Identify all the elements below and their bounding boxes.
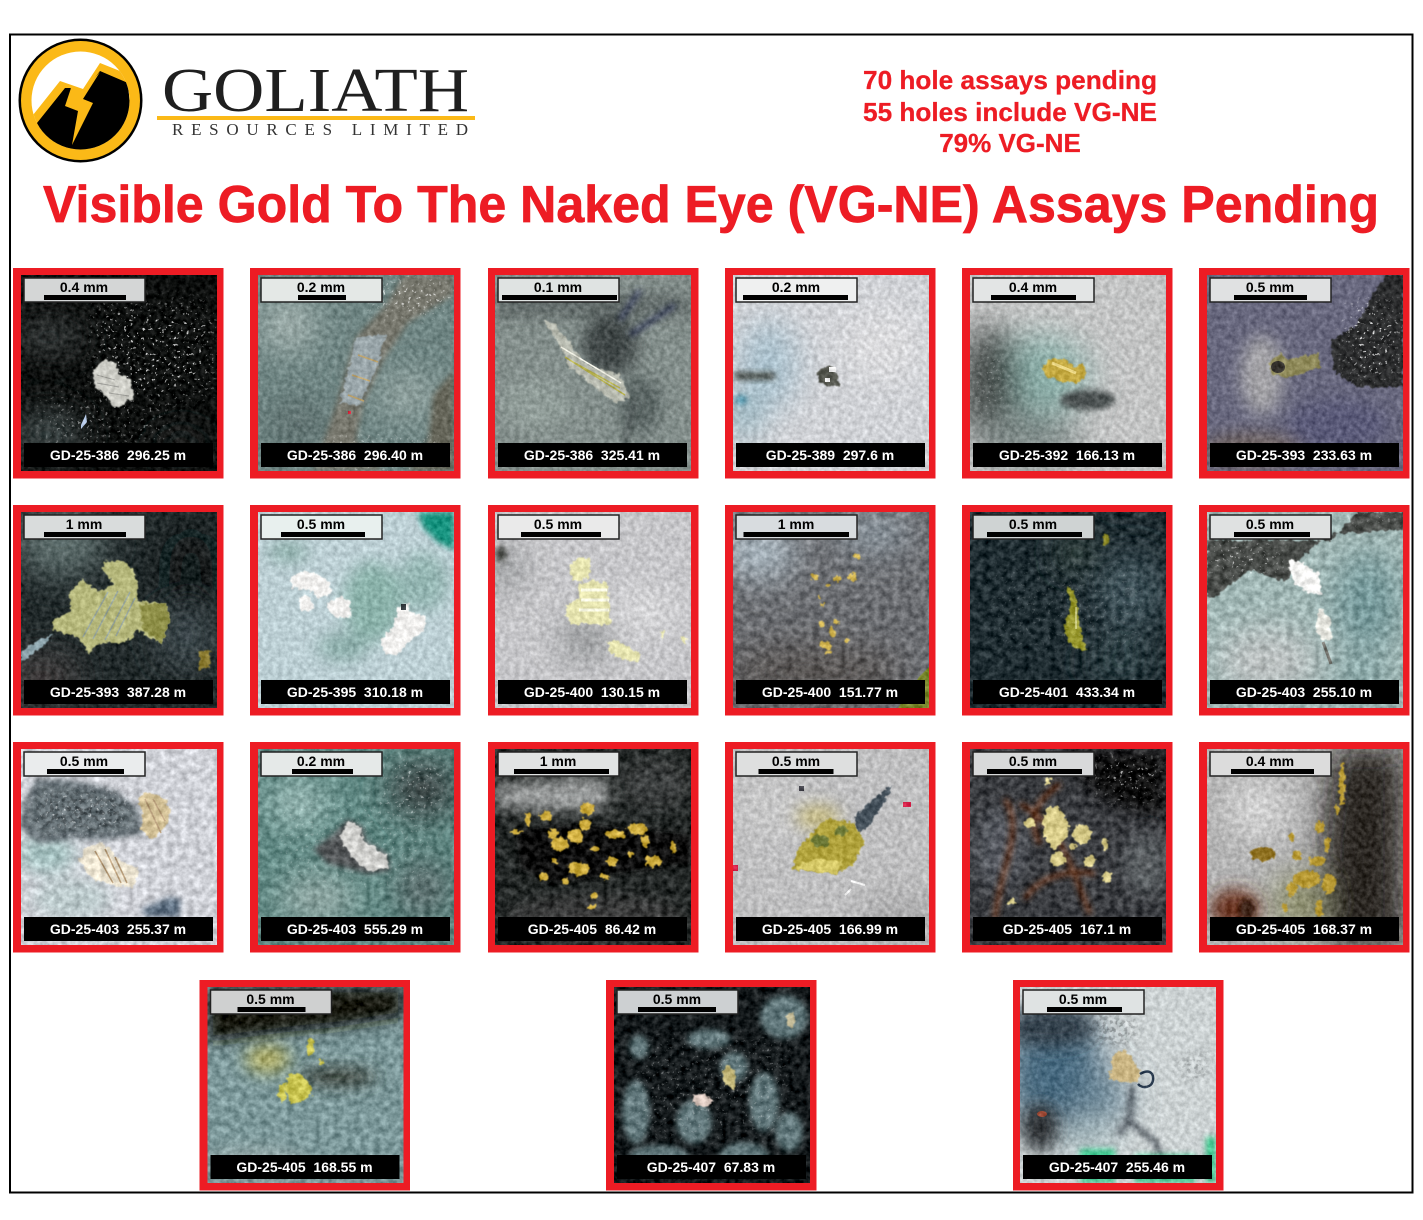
photo	[208, 987, 404, 1183]
photo	[487, 512, 691, 708]
scale bar: 0.5 mm: 0.5 mm	[772, 753, 820, 769]
caption: GD-25-405 167.1 m	[1003, 921, 1131, 937]
logo: Goliath Resources Limited	[18, 38, 475, 165]
caption	[210, 1155, 400, 1179]
caption: GD-25-389 297.6 m	[766, 447, 894, 463]
scale bar: 0.4 mm: 0.4 mm	[1246, 753, 1294, 769]
caption	[498, 917, 687, 941]
caption: GD-25-405 166.99 m	[762, 921, 898, 937]
panel: GD-25-386 296.25 m	[8, 268, 224, 478]
title: Visible Gold To The Naked Eye (VG-NE) Assays Pending	[43, 176, 1379, 234]
caption: GD-25-407 67.83 m	[647, 1159, 775, 1175]
photo	[258, 275, 454, 471]
caption	[1023, 1155, 1212, 1179]
photo	[1005, 987, 1216, 1183]
caption: GD-25-400 151.77 m	[762, 684, 898, 700]
scale bar: 0.5 mm: 0.5 mm	[1059, 991, 1107, 1007]
callout: pending statistics: 55 holes include VG-NE	[863, 97, 1157, 127]
scale bar: 0.1 mm: 0.1 mm	[534, 279, 582, 295]
scale bar: 0.5 mm	[1210, 515, 1331, 539]
scale bar: 0.5 mm	[973, 515, 1094, 539]
scale bar: 0.5 mm	[973, 752, 1094, 776]
photo	[960, 275, 1166, 471]
scale bar: 0.2 mm	[261, 752, 382, 776]
scale bar: 0.2 mm: 0.2 mm	[297, 753, 345, 769]
panel: GD-25-386 296.40 m	[250, 268, 460, 478]
panel: GD-25-393 387.28 m	[1, 505, 224, 716]
panel: GD-25-405 86.42 m	[488, 742, 698, 952]
wordmark: GOLIATH	[162, 57, 469, 125]
panel: GD-25-403 555.29 m	[250, 742, 460, 952]
scale bar: 0.5 mm	[1023, 990, 1144, 1014]
scale bar: 0.2 mm	[736, 278, 857, 302]
scale bar: 1 mm	[498, 752, 619, 776]
panel: GD-25-389 297.6 m	[725, 268, 936, 478]
caption: GD-25-392 166.13 m	[999, 447, 1135, 463]
panel: GD-25-403 255.10 m	[1199, 505, 1410, 716]
scale bar: 0.4 mm: 0.4 mm	[1009, 279, 1057, 295]
scale bar: 0.5 mm: 0.5 mm	[1009, 516, 1057, 532]
panel: GD-25-407 255.46 m	[1005, 980, 1224, 1190]
callout: pending statistics: 79% VG-NE	[939, 128, 1081, 158]
caption	[24, 917, 213, 941]
photo	[718, 512, 929, 708]
caption: GD-25-393 233.63 m	[1236, 447, 1372, 463]
callout: pending statistics	[863, 65, 1157, 158]
panel: GD-25-392 166.13 m	[960, 268, 1172, 478]
scale bar: 0.4 mm	[24, 278, 145, 302]
caption	[973, 917, 1162, 941]
photo	[258, 512, 454, 708]
photo	[8, 275, 217, 471]
photo	[725, 275, 929, 471]
caption	[617, 1155, 806, 1179]
caption: GD-25-386 325.41 m	[524, 447, 660, 463]
scale bar: 1 mm	[736, 515, 857, 539]
scale bar: 0.5 mm: 0.5 mm	[1246, 516, 1294, 532]
caption: GD-25-405 168.55 m	[236, 1159, 373, 1175]
panel: GD-25-386 325.41 m	[488, 268, 698, 478]
photo	[495, 749, 691, 945]
caption	[736, 443, 925, 467]
caption	[1210, 917, 1399, 941]
scale bar: 0.4 mm	[1210, 752, 1331, 776]
callout: pending statistics: 70 hole assays pending	[863, 65, 1157, 95]
gold rule	[157, 116, 475, 120]
icon: mountain and lightning emblem	[18, 38, 142, 165]
caption: GD-25-405 168.37 m	[1236, 921, 1372, 937]
caption	[973, 443, 1162, 467]
scale bar: 0.5 mm	[617, 990, 738, 1014]
caption	[736, 680, 925, 704]
caption: GD-25-403 555.29 m	[287, 921, 423, 937]
caption: GD-25-401 433.34 m	[999, 684, 1135, 700]
caption: GD-25-403 255.10 m	[1236, 684, 1372, 700]
photo	[16, 749, 217, 945]
scale bar: 0.5 mm: 0.5 mm	[297, 516, 345, 532]
panel: GD-25-405 168.37 m	[1199, 742, 1410, 952]
scale bar: 0.5 mm	[498, 515, 619, 539]
caption	[973, 680, 1162, 704]
photo	[970, 749, 1167, 945]
caption: GD-25-386 296.25 m	[50, 447, 186, 463]
caption	[1210, 443, 1399, 467]
panel: GD-25-393 233.63 m	[1199, 268, 1410, 478]
tagline: RESOURCES LIMITED	[172, 120, 468, 139]
photo	[495, 275, 691, 471]
caption	[261, 680, 450, 704]
scale bar: 1 mm: 1 mm	[66, 516, 102, 532]
caption: GD-25-405 86.42 m	[528, 921, 656, 937]
caption: GD-25-400 130.15 m	[524, 684, 660, 700]
photo	[970, 512, 1166, 708]
panel: GD-25-400 151.77 m	[718, 505, 936, 716]
photo	[614, 987, 810, 1183]
caption: GD-25-407 255.46 m	[1049, 1159, 1185, 1175]
caption: GD-25-403 255.37 m	[50, 921, 186, 937]
scale bar: 0.4 mm	[973, 278, 1094, 302]
photo	[1207, 512, 1403, 708]
panel: GD-25-405 168.55 m	[200, 980, 410, 1190]
scale bar: 1 mm: 1 mm	[540, 753, 576, 769]
scale bar: 0.5 mm	[261, 515, 382, 539]
caption	[498, 680, 687, 704]
caption	[24, 443, 213, 467]
photo	[733, 749, 938, 945]
scale bar: 0.2 mm: 0.2 mm	[772, 279, 820, 295]
scale bar: 0.5 mm	[24, 752, 145, 776]
panel: GD-25-395 310.18 m	[250, 505, 460, 716]
panel: GD-25-400 130.15 m	[487, 505, 698, 716]
scale bar: 0.2 mm: 0.2 mm	[297, 279, 345, 295]
scale bar: 0.1 mm	[498, 278, 619, 302]
scale bar: 0.5 mm	[210, 990, 332, 1014]
caption: GD-25-386 296.40 m	[287, 447, 423, 463]
caption	[736, 917, 925, 941]
scale bar: 0.5 mm	[736, 752, 857, 776]
caption	[498, 443, 687, 467]
panel: GD-25-407 67.83 m	[606, 980, 816, 1190]
scale bar: 1 mm: 1 mm	[778, 516, 814, 532]
panel: GD-25-401 433.34 m	[962, 505, 1172, 716]
photo	[1202, 275, 1403, 471]
photo	[1207, 749, 1403, 945]
caption	[24, 680, 213, 704]
scale bar: 0.5 mm: 0.5 mm	[246, 991, 295, 1007]
scale bar: 0.5 mm: 0.5 mm	[1009, 753, 1057, 769]
caption	[261, 443, 450, 467]
scale bar: 1 mm	[24, 515, 145, 539]
scale bar: 0.5 mm: 0.5 mm	[60, 753, 108, 769]
caption: GD-25-393 387.28 m	[50, 684, 186, 700]
panel: GD-25-405 166.99 m	[725, 742, 938, 952]
scale bar: 0.5 mm: 0.5 mm	[1246, 279, 1294, 295]
photo	[21, 512, 217, 708]
panel: GD-25-403 255.37 m	[13, 742, 224, 952]
caption	[261, 917, 450, 941]
scale bar: 0.4 mm: 0.4 mm	[60, 279, 108, 295]
panel: GD-25-405 167.1 m	[962, 742, 1172, 952]
photo	[258, 749, 458, 945]
scale bar: 0.5 mm: 0.5 mm	[534, 516, 582, 532]
scale bar: 0.5 mm: 0.5 mm	[653, 991, 701, 1007]
scale bar: 0.5 mm	[1210, 278, 1331, 302]
caption: GD-25-395 310.18 m	[287, 684, 423, 700]
scale bar: 0.2 mm	[261, 278, 382, 302]
caption	[1210, 680, 1399, 704]
